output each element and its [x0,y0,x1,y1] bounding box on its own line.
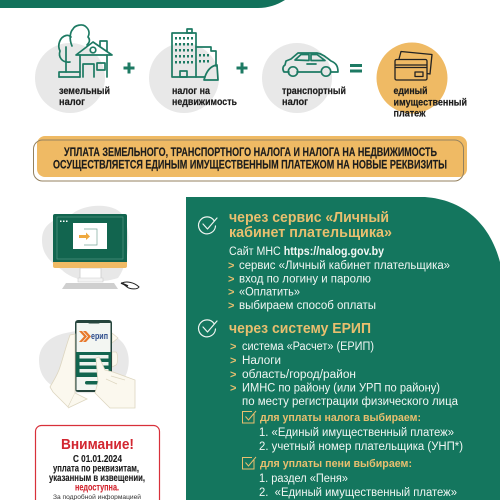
warning box: указанным в извещении, [49,472,145,484]
warning box: Внимание! [61,436,134,453]
tax selection block: 2. учетный номер плательщика (УНП*) [259,441,463,453]
unified payment item [376,42,467,120]
text: ERIP steps: Налоги [242,355,281,367]
transport tax item: налог [282,96,309,108]
warning box: С 01.01.2024 [73,453,122,465]
text: ERIP steps: область/город/район [242,369,356,381]
text: personal cabinet steps: «Оплатить» [239,286,300,298]
penalty selection block: 1. раздел «Пеня» [259,473,348,485]
text: personal cabinet steps [228,246,450,312]
text: ERIP steps: > [230,341,236,353]
icon: check circle [199,320,217,337]
text: personal cabinet steps: > [228,274,234,286]
text: personal cabinet steps: выбираем способ оплаты [239,300,376,312]
unified payment item: имущественный [394,96,467,108]
heading: personal cabinet: через сервис «Личный [229,209,389,226]
heading: personal cabinet [229,209,392,241]
penalty selection block [242,457,457,499]
text: personal cabinet steps: сервис «Личный кабинет плательщика» [239,260,450,272]
tax selection block [242,411,463,453]
icon: plus [236,62,248,74]
icon: equals [350,66,362,71]
text: ERIP steps: ИМНС по району (или УРП по району) [242,382,440,394]
unified payment item: платеж [394,108,426,120]
text: personal cabinet steps: > [228,300,234,312]
warning box: уплата по реквизитам, [53,462,139,474]
tax selection block: для уплаты налога выбираем: [260,412,421,424]
panel: payment methods [186,197,500,500]
icon: plus [124,62,134,74]
text: ERIP steps: система «Расчет» (ЕРИП) [242,341,374,353]
tax selection block: 1. «Единый имущественный платеж» [259,427,454,439]
illustration: phone with ERIP [39,320,135,408]
text: ERIP steps: > [230,382,236,394]
warning box: недоступна. [75,482,119,494]
text: ERIP steps: по месту регистрации физического лица [242,396,459,408]
penalty selection block: для уплаты пени выбираем: [260,458,412,470]
notice banner [34,136,467,181]
transport tax item: транспортный [282,85,346,97]
warning box [36,426,160,500]
property tax item [149,29,237,113]
unified payment item: единый [394,85,428,97]
land tax item: земельный [59,85,110,97]
text: ERIP steps: > [230,369,236,381]
text: personal cabinet steps: > [228,260,234,272]
transport tax item [262,43,346,113]
heading: personal cabinet: кабинет плательщика» [229,224,392,241]
illustration: computer [42,206,139,289]
land tax item [35,25,112,113]
icon: check circle [199,217,217,234]
text: personal cabinet steps: > [228,286,234,298]
top banner [0,0,285,8]
property tax item: налог на [172,85,210,97]
heading: ERIP: через систему ЕРИП [229,320,371,337]
penalty selection block: 2. «Единый имущественный платеж» [259,487,457,499]
text: personal cabinet steps: Сайт МНС https://nalog.gov.by [229,246,385,258]
tax formula row [35,25,467,120]
text: personal cabinet steps: вход по логину и паролю [239,274,371,286]
text: ERIP steps [230,341,459,408]
illustration: phone with ERIP: ерип [91,331,108,341]
land tax item: налог [59,96,86,108]
property tax item: недвижимость [172,96,237,108]
text: ERIP steps: > [230,355,236,367]
